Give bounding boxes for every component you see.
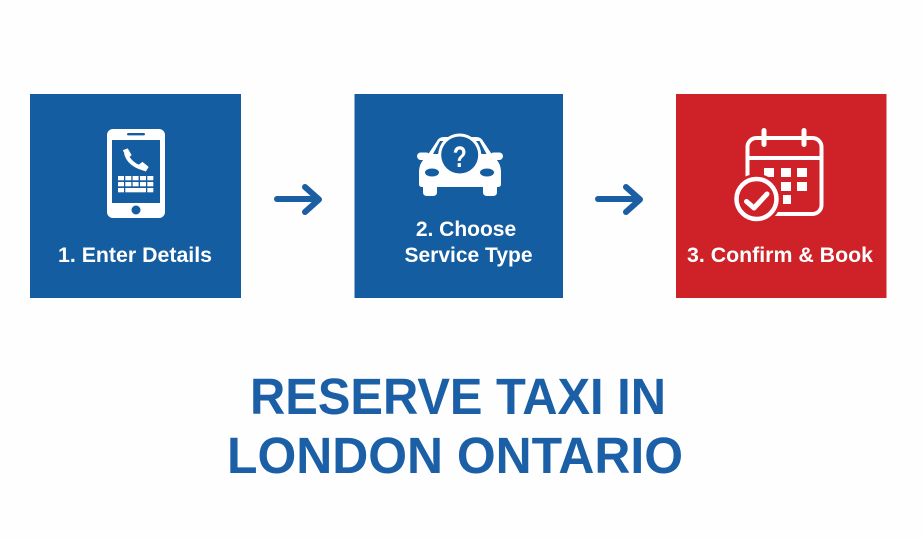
label: step 2: Service Type: [404, 244, 533, 267]
panel: step 1 enter details: [30, 94, 241, 298]
label: step 2: 2. Choose: [416, 218, 516, 241]
label: step 1: 1. Enter Details: [58, 244, 212, 267]
panel: step 2 choose service type: [354, 94, 563, 298]
icon: car with question mark: [417, 134, 503, 196]
icon: smartphone with phone handset and keypad: [107, 129, 165, 218]
icon: car with question mark: ?: [453, 141, 467, 174]
label: step 3: 3. Confirm & Book: [687, 244, 873, 267]
arrow: step 1 to step 2: [277, 187, 319, 212]
title: [227, 368, 683, 484]
panel: step 3 confirm and book: [676, 94, 886, 298]
title: RESERVE TAXI IN: [250, 368, 666, 425]
icon: calendar with check mark: [732, 128, 823, 224]
title: LONDON ONTARIO: [227, 427, 683, 484]
arrow: step 2 to step 3: [598, 187, 640, 212]
